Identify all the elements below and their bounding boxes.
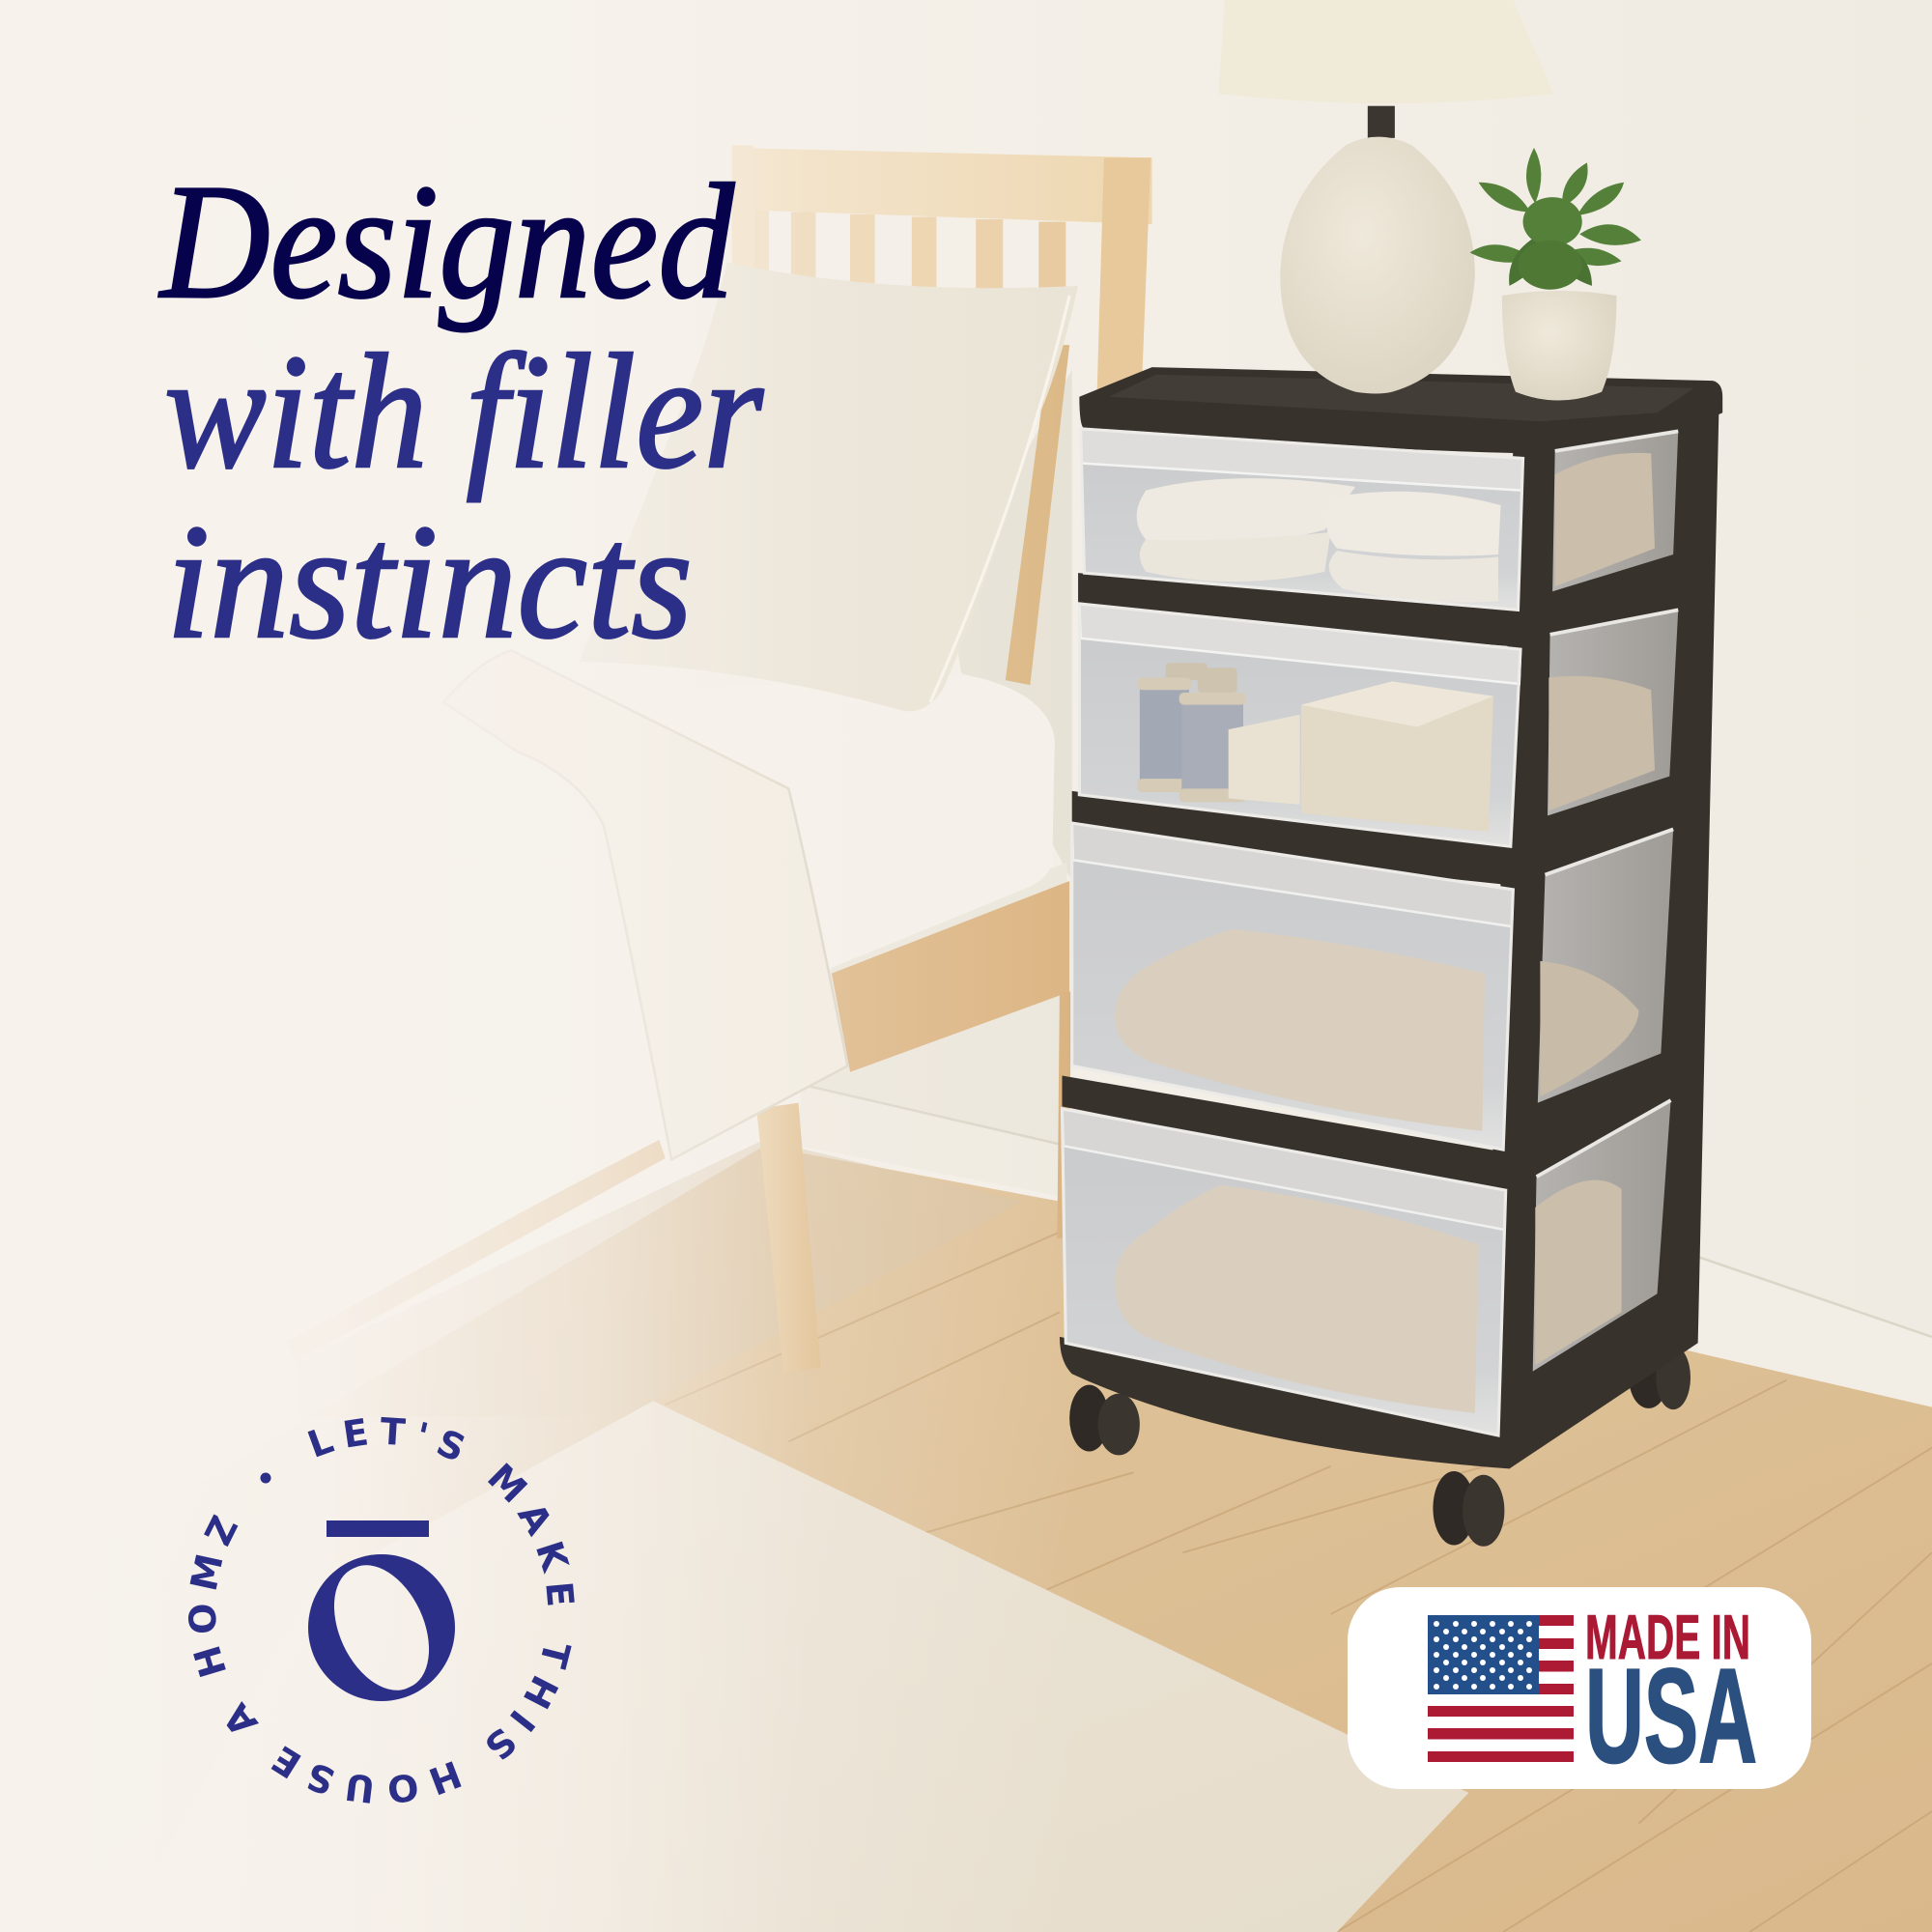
usa label: USA: [1585, 1641, 1757, 1791]
table lamp: [1218, 0, 1553, 394]
made in usa badge: [1348, 1587, 1811, 1791]
bed headboard: [732, 146, 1152, 685]
lamp shade: [1218, 0, 1553, 103]
spools: [1137, 663, 1246, 802]
folded towel: [1115, 1185, 1479, 1413]
drawer 4 face band: [1062, 1109, 1506, 1230]
circular slogan: LET'S MAKE THIS HOUSE A HOMZ: [187, 1416, 575, 1804]
drawer 3 face band: [1072, 823, 1513, 926]
baseboards: [799, 1084, 1932, 1407]
side window 4: [1533, 1100, 1671, 1372]
drawer 1 face band: [1081, 429, 1523, 491]
left fade overlay: [0, 0, 1109, 1932]
made in label: MADE IN: [1585, 1602, 1750, 1672]
heading line 2: with filler: [164, 321, 764, 502]
drawer 2 face band: [1079, 604, 1520, 684]
folded towels right: [1326, 492, 1501, 603]
logo ring: [308, 1554, 455, 1701]
heading line 1: Designed: [158, 151, 735, 332]
large box: [1301, 681, 1493, 832]
drawer 4: [1062, 1109, 1506, 1435]
floor: [0, 1146, 1932, 1932]
wall under bed: [801, 863, 1067, 1152]
pillow: [579, 263, 1078, 711]
side window 2: [1548, 610, 1678, 815]
lamp neck: [1368, 106, 1395, 138]
shadow under bed: [296, 1140, 1023, 1589]
heading line 3: instincts: [166, 491, 693, 672]
potted plant: [1470, 148, 1641, 401]
shelf bars: [1062, 573, 1552, 1195]
lamp base: [1280, 137, 1475, 394]
lower-left fade overlay: [0, 1417, 616, 1932]
badge dot: [261, 1472, 270, 1484]
bed frame rail and leg: [283, 881, 1072, 1373]
side window 3: [1538, 829, 1673, 1103]
wheel right: [1629, 1346, 1690, 1409]
flag stars: [1434, 1621, 1532, 1690]
wheels: [1069, 1346, 1690, 1547]
plant pot: [1502, 291, 1616, 401]
folded towels left: [1137, 478, 1355, 582]
flag canton: [1428, 1615, 1539, 1694]
leaves: [1470, 148, 1641, 290]
blanket: [443, 650, 848, 1159]
storage cart: [1060, 367, 1722, 1547]
wheel left: [1069, 1385, 1140, 1455]
american flag: [1428, 1615, 1574, 1762]
brand badge: [187, 1416, 575, 1804]
faded plant silhouette: [160, 166, 321, 376]
badge background: [1348, 1587, 1811, 1789]
drawer 3: [1072, 823, 1513, 1150]
wall shade behind bed: [949, 370, 1072, 881]
mattress: [0, 674, 1055, 1454]
flag stripes: [1428, 1615, 1574, 1762]
cart body: [1485, 412, 1719, 1468]
cart base: [1060, 1337, 1528, 1468]
folded towel: [1115, 929, 1485, 1131]
logo bar: [327, 1520, 429, 1537]
drawer 1: [1081, 429, 1523, 610]
side window 1: [1552, 431, 1678, 591]
tray top: [1079, 367, 1722, 453]
drawer 2: [1079, 604, 1520, 846]
small box: [1229, 715, 1300, 805]
heading: [158, 151, 764, 672]
wheel centre: [1433, 1471, 1504, 1547]
rug: [124, 1401, 1468, 1932]
